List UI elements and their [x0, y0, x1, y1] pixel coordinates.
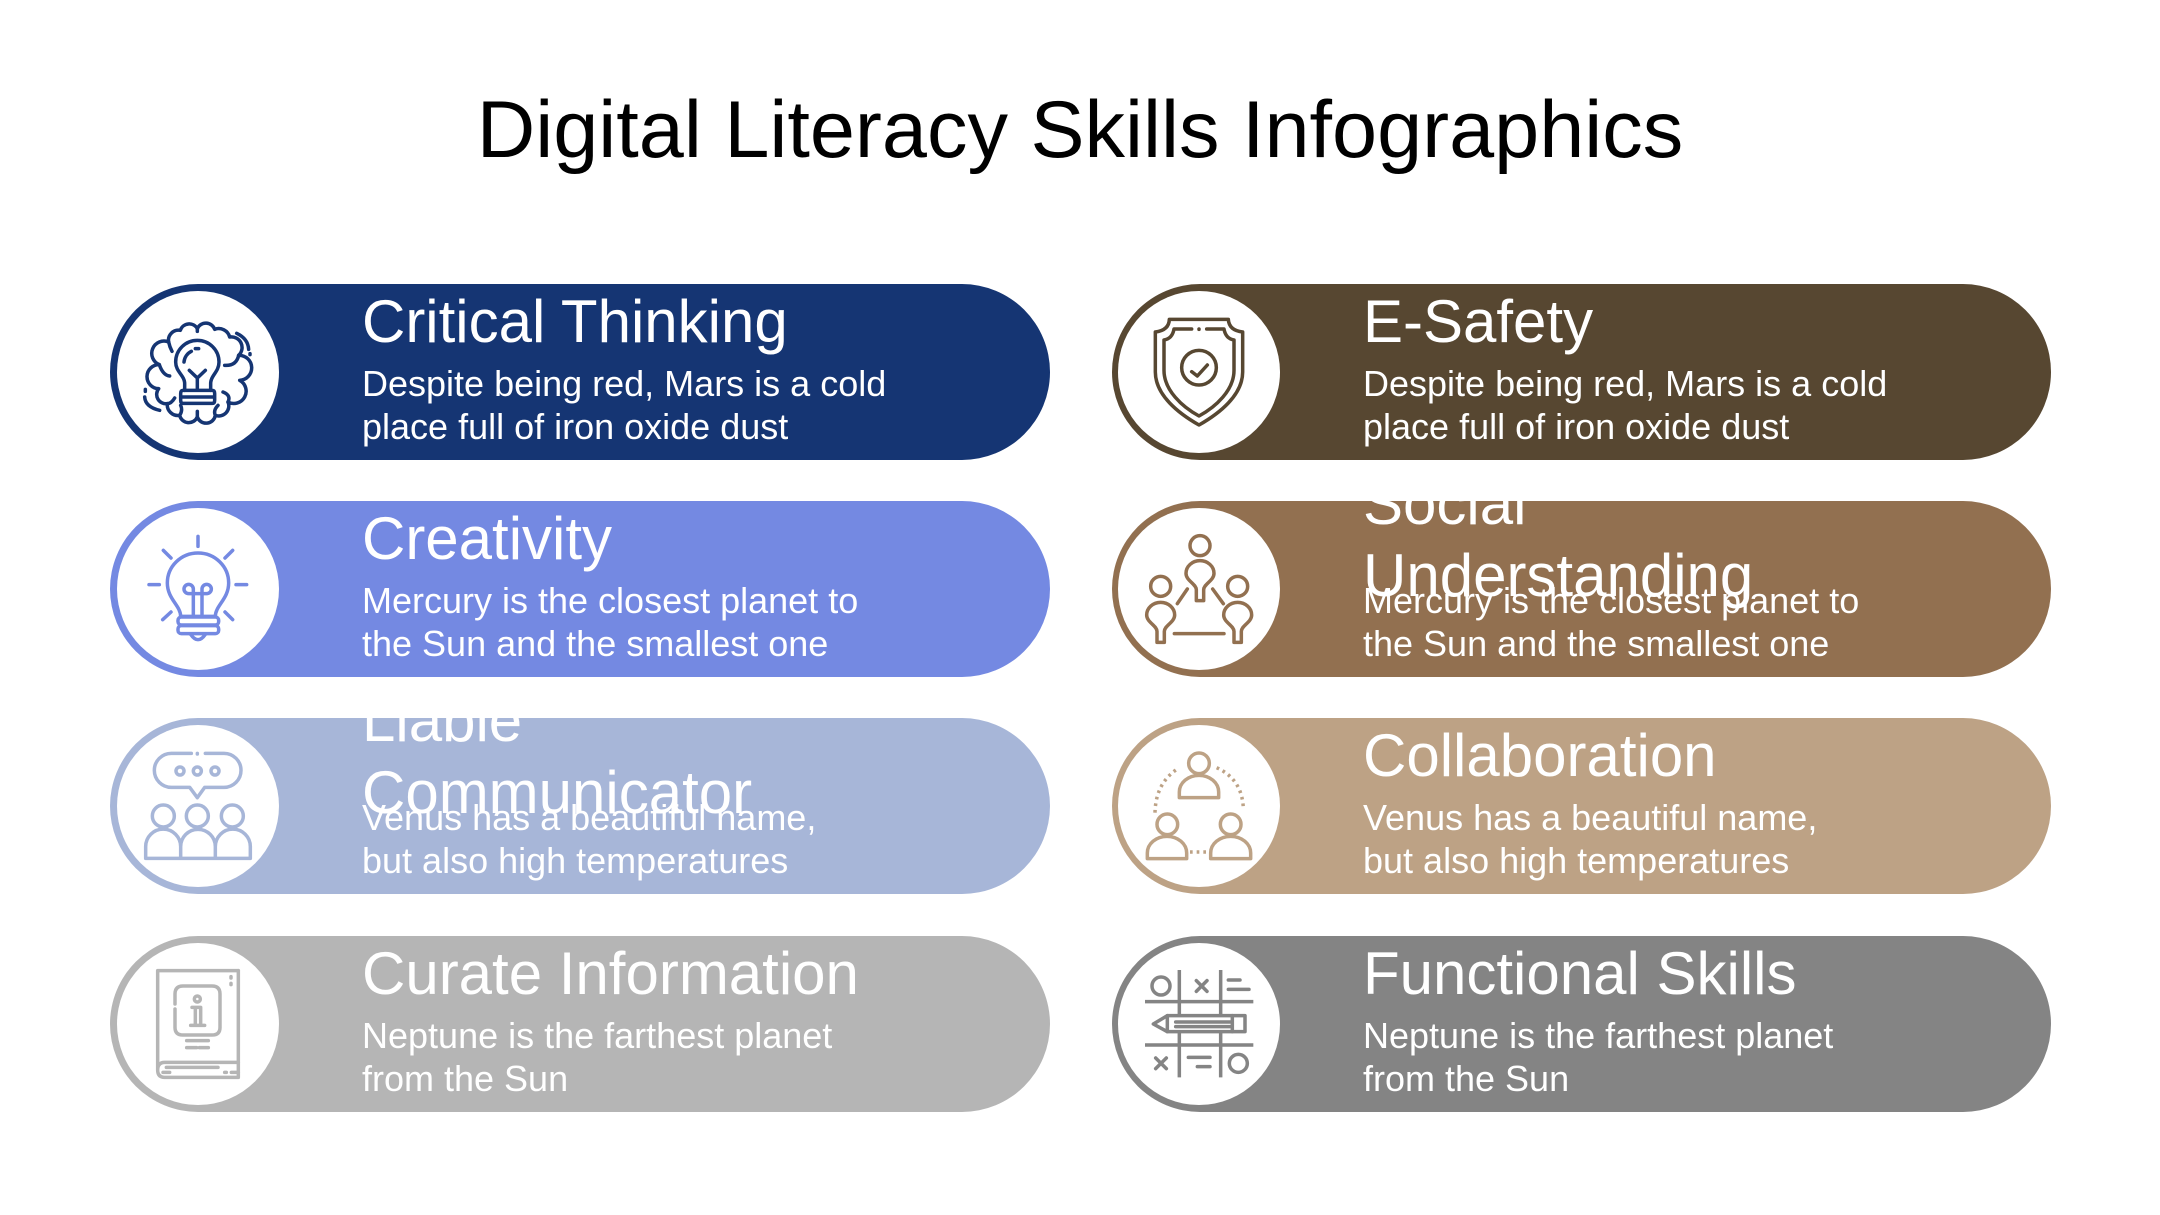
heading: Critical Thinking [362, 288, 788, 355]
heading: Social [1363, 470, 1526, 537]
icon: three people in a dotted circle [1146, 751, 1252, 860]
icon: three connected people [1144, 534, 1254, 644]
body text: Mercury is the closest planet to [1363, 580, 1859, 621]
icon: light bulb [147, 534, 248, 642]
panel: E-Safety [1112, 284, 2051, 460]
icon circle: Functional Skills [1118, 943, 1280, 1105]
body text: place full of iron oxide dust [362, 406, 788, 447]
icon circle: Critical Thinking [117, 291, 279, 453]
icon: speech bubble and three people [144, 752, 252, 860]
body text: the Sun and the smallest one [1363, 623, 1829, 664]
icon circle: Liable Communicator [117, 725, 279, 887]
body text [362, 363, 886, 447]
body text [362, 1015, 832, 1099]
panel: Collaboration [1112, 718, 2051, 894]
icon circle: Curate Information [117, 943, 279, 1105]
panel: Liable Communicator [110, 718, 1050, 894]
body text [1363, 580, 1859, 664]
icon circle: Creativity [117, 508, 279, 670]
body text [362, 580, 858, 664]
body text [1363, 1015, 1833, 1099]
body text: from the Sun [1363, 1058, 1569, 1099]
body text: Despite being red, Mars is a cold [362, 363, 886, 404]
icon circle: Social Understanding [1118, 508, 1280, 670]
body text: but also high temperatures [362, 840, 788, 881]
panel: Critical Thinking [110, 284, 1050, 460]
panel: Social Understanding [1112, 501, 2051, 677]
heading: Communicator [362, 759, 752, 826]
body text: Mercury is the closest planet to [362, 580, 858, 621]
panel: Curate Information [110, 936, 1050, 1112]
body text: but also high temperatures [1363, 840, 1789, 881]
icon: information book [156, 968, 240, 1080]
icon: tic-tac-toe grid with pencil [1145, 970, 1254, 1078]
heading: Understanding [1363, 542, 1753, 609]
icon: brain with light bulb [142, 321, 254, 425]
panel: Functional Skills [1112, 936, 2051, 1112]
heading: Collaboration [1363, 722, 1717, 789]
body text: Neptune is the farthest planet [362, 1015, 832, 1056]
body text [1363, 363, 1887, 447]
heading: Curate Information [362, 940, 859, 1007]
icon circle: E-Safety [1118, 291, 1280, 453]
heading [1363, 470, 1753, 609]
heading [362, 687, 752, 826]
body text [1363, 797, 1817, 881]
body text: from the Sun [362, 1058, 568, 1099]
icon circle: Collaboration [1118, 725, 1280, 887]
title: Digital Literacy Skills Infographics [477, 85, 1683, 175]
body text [362, 797, 816, 881]
body text: the Sun and the smallest one [362, 623, 828, 664]
body text: Venus has a beautiful name, [1363, 797, 1817, 838]
heading: Creativity [362, 505, 612, 572]
body text: place full of iron oxide dust [1363, 406, 1789, 447]
icon: shield with check [1154, 318, 1244, 427]
heading: Liable [362, 687, 522, 754]
heading: E-Safety [1363, 288, 1593, 355]
panel: Creativity [110, 501, 1050, 677]
heading: Functional Skills [1363, 940, 1797, 1007]
body text: Venus has a beautiful name, [362, 797, 816, 838]
body text: Despite being red, Mars is a cold [1363, 363, 1887, 404]
body text: Neptune is the farthest planet [1363, 1015, 1833, 1056]
